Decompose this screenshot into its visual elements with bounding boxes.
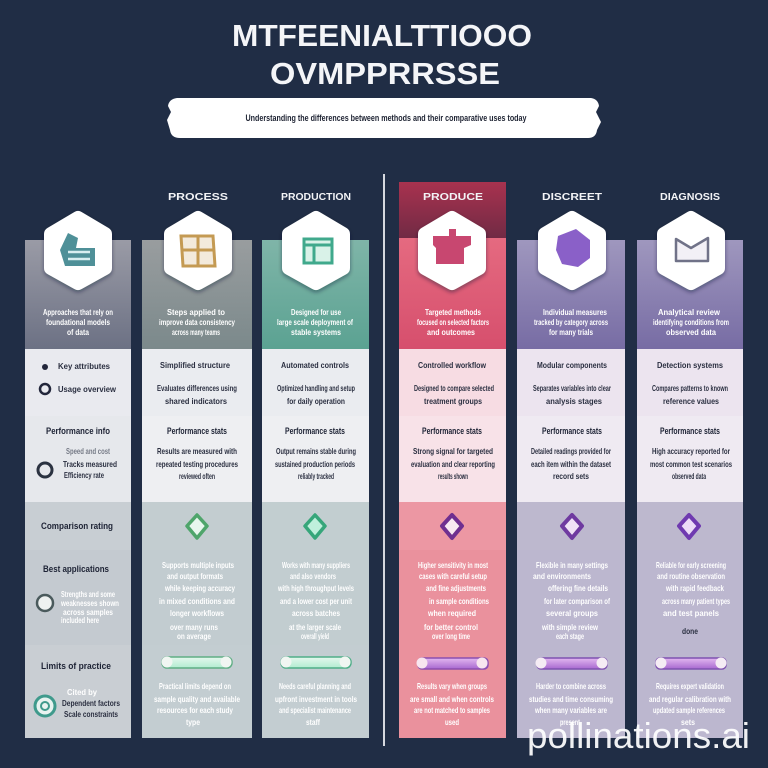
column 1 features: Key attributes [58, 361, 110, 371]
column 4 details [411, 360, 495, 481]
column 3 row 4 text [277, 560, 354, 641]
column 2 details: Performance stats [167, 426, 227, 436]
column 5 description: tracked by category across [534, 317, 608, 327]
column 2 details: Results are measured with [157, 446, 237, 456]
column 5 row 5 text: when many variables are [534, 705, 607, 715]
column 2 row 4 text: Supports multiple inputs [162, 560, 234, 570]
column 6 row 5 text: updated sample references [653, 705, 725, 715]
column 4 row 4 text: over long time [432, 631, 470, 641]
column 5 row 5 text [529, 681, 613, 727]
column 6 details: reference values [663, 396, 719, 406]
column 3 details [275, 360, 356, 481]
column 3 description: large scale deployment of [277, 317, 353, 327]
column 6 row 5 text [649, 681, 731, 727]
column 4 details: Designed to compare selected [414, 383, 494, 393]
column 2 row 4 text: longer workflows [170, 608, 224, 618]
column 2 details: reviewed often [179, 471, 215, 481]
column 5 row 5 text: present [560, 717, 580, 727]
column 5 row 5 text: Harder to combine across [536, 681, 606, 691]
column 5 details [531, 360, 611, 481]
icon: column 2 range bar [162, 656, 232, 668]
column 6 row 4 text: Reliable for early screening [656, 560, 726, 570]
column 3 row 4 text: with high throughput levels [277, 583, 354, 593]
column 1 features: Best applications [43, 564, 109, 574]
column 4 row 4 text: cases with careful setup [419, 571, 487, 581]
column 6 details: High accuracy reported for [652, 446, 730, 456]
column 4 description: focused on selected factors [417, 317, 489, 327]
column 3 heading: PRODUCTION [281, 192, 351, 203]
column 3 description: Designed for use [291, 307, 341, 317]
panel: column 5 [517, 192, 625, 738]
column 6 row 4 text: done [682, 626, 698, 636]
icon: column 2 diamond [187, 515, 207, 538]
column 3 details: Automated controls [281, 360, 349, 370]
column 1 features: Efficiency rate [64, 470, 104, 480]
panel: column 2 [142, 192, 252, 738]
column 2 row 4 text: in mixed conditions and [159, 596, 235, 606]
column 2 details: repeated testing procedures [156, 459, 238, 469]
column 3 row 4 text: and also vendors [290, 571, 336, 581]
column 4 description: and outcomes [427, 327, 475, 337]
column 1 description [43, 307, 113, 337]
column 1 features [38, 361, 117, 574]
column 5 details: analysis stages [546, 396, 602, 406]
panel: column 4 [399, 182, 506, 738]
column 4 description [417, 307, 489, 337]
column 2 heading: PROCESS [168, 192, 228, 203]
column 2 description: across many teams [172, 327, 220, 337]
column 1 row 4 text: included here [61, 615, 99, 625]
column 4 details: results shown [438, 471, 468, 481]
divider line [383, 174, 385, 746]
icon: column 4 hexagon [425, 218, 479, 283]
column 4 row 4 text: in sample conditions [429, 596, 489, 606]
column 5 details: Modular components [537, 360, 607, 370]
column 1 row 4 text: weaknesses shown [60, 598, 119, 608]
title: MTFEENIALTTIOOO [232, 18, 532, 53]
column 3 row 5 text: and specialist maintenance [279, 705, 351, 715]
column 1 features: Speed and cost [66, 446, 110, 456]
column 4 details: Performance stats [422, 426, 482, 436]
panel: column 3 [262, 192, 369, 738]
column 6 details: most common test scenarios [650, 459, 732, 469]
column 2 row 5 text: type [186, 717, 200, 727]
column 5 details: Performance stats [542, 426, 602, 436]
column 4 row 4 text: when required [427, 608, 476, 618]
icon: column 4 range bar [416, 658, 488, 669]
column 5 row 4 text: offering fine details [548, 583, 608, 593]
column 6 details [650, 360, 732, 481]
column 6 row 5 text: and regular calibration with [649, 694, 731, 704]
icon: column 1 hexagon [51, 218, 105, 283]
icon: column 6 hexagon [664, 218, 718, 283]
column 3 row 5 text: staff [306, 717, 320, 727]
title: OVMPPRRSSE [270, 56, 500, 91]
column 3 row 5 text [275, 681, 357, 727]
column 2 row 5 text: resources for each study [157, 705, 233, 715]
column 3 row 4 text: and a lower cost per unit [280, 596, 352, 606]
column 1 description: of data [67, 327, 89, 337]
icon: column 6 diamond [679, 515, 699, 538]
column 6 row 5 text: sets [681, 717, 695, 727]
column 5 row 4 text: with simple review [541, 622, 598, 632]
column 4 row 5 text: used [445, 717, 459, 727]
column 4 row 4 text: for better control [424, 622, 478, 632]
column 3 details: Output remains stable during [276, 446, 356, 456]
column 6 details: Performance stats [660, 426, 720, 436]
column 3 description [277, 307, 353, 337]
column 3 details: Performance stats [285, 426, 345, 436]
column 5 details: Detailed readings provided for [531, 446, 611, 456]
column 5 details: Separates variables into clear [533, 383, 611, 393]
column 1 description: foundational models [46, 317, 110, 327]
column 5 row 4 text: and environments [533, 571, 591, 581]
icon: column 5 range bar [536, 658, 608, 669]
icon: column 4 diamond [442, 515, 462, 538]
column 5 row 4 text: several groups [546, 608, 598, 618]
column 2 details: shared indicators [165, 396, 227, 406]
column 5 row 5 text: studies and time consuming [529, 694, 613, 704]
column 6 row 4 text: with rapid feedback [665, 583, 724, 593]
column 1 row 4 text [60, 589, 119, 625]
column 5 row 4 text: each stage [556, 631, 584, 641]
column 1 row 5 heading: Limits of practice [41, 661, 111, 671]
column 6 row 5 text: Requires expert validation [656, 681, 724, 691]
column 1 description: Approaches that rely on [43, 307, 113, 317]
panel: column 6 [637, 192, 743, 738]
column 6 row 4 text [656, 560, 730, 636]
column 3 description: stable systems [291, 327, 341, 337]
column 2 row 5 text: Practical limits depend on [159, 681, 231, 691]
column 2 row 5 text: sample quality and available [154, 694, 240, 704]
column 1 features: Performance info [46, 426, 110, 436]
column 3 row 4 text: Works with many suppliers [282, 560, 350, 570]
column 3 details: reliably tracked [298, 471, 334, 481]
column 3 row 4 text: across batches [292, 608, 340, 618]
panel: column 1 [25, 218, 131, 738]
column 6 heading: DIAGNOSIS [660, 192, 720, 203]
column 3 row 4 text: overall yield [301, 631, 329, 641]
column 4 row 5 text: Results vary when groups [417, 681, 487, 691]
column 3 row 5 text: Needs careful planning and [279, 681, 351, 691]
column 2 row 4 text [159, 560, 235, 641]
column 3 details: Optimized handling and setup [277, 383, 355, 393]
column 2 row 4 text: and output formats [167, 571, 223, 581]
column 2 details: Simplified structure [160, 360, 230, 370]
column 1 row 5 text [62, 687, 120, 719]
icon: column 5 diamond [562, 515, 582, 538]
column 4 row 5 text: are small and when controls [410, 694, 494, 704]
column 1 features: Comparison rating [41, 521, 113, 531]
column 2 description: Steps applied to [167, 307, 225, 317]
column 4 row 5 text: are not matched to samples [414, 705, 490, 715]
icon: column 3 range bar [280, 656, 351, 668]
column 2 details [156, 360, 238, 481]
column 6 description: Analytical review [658, 307, 720, 317]
column 4 row 5 text [410, 681, 494, 727]
column 6 row 4 text: and test panels [663, 608, 719, 618]
column 3 details: for daily operation [287, 396, 345, 406]
watermark: pollinations.ai [527, 715, 750, 756]
column 5 details: each item within the dataset [531, 459, 611, 469]
column 6 details: Compares patterns to known [652, 383, 728, 393]
icon: column 3 diamond [305, 515, 325, 538]
column 4 details: Strong signal for targeted [413, 446, 493, 456]
column 4 details: treatment groups [424, 396, 482, 406]
column 6 description [653, 307, 729, 337]
column 5 row 4 text: Flexible in many settings [536, 560, 608, 570]
column 3 row 4 text: at the larger scale [289, 622, 341, 632]
column 3 details: sustained production periods [275, 459, 355, 469]
column 5 description: for many trials [549, 327, 593, 337]
column 5 heading: DISCREET [542, 192, 602, 203]
column 4 row 4 text: and fine adjustments [426, 583, 486, 593]
column 1 row 5 text: Scale constraints [64, 709, 118, 719]
column 1 row 4 text: across samples [63, 607, 113, 617]
column 6 details: Detection systems [657, 360, 723, 370]
column 6 description: identifying conditions from [653, 317, 729, 327]
column 2 details: Evaluates differences using [157, 383, 237, 393]
column 6 row 4 text: across many patient types [662, 596, 730, 606]
icon: column 3 hexagon [289, 218, 343, 283]
column 6 description: observed data [666, 327, 716, 337]
column 4 description: Targeted methods [425, 307, 481, 317]
column 2 row 4 text: on average [177, 631, 211, 641]
icon: column 6 range bar [656, 658, 726, 669]
column 5 row 4 text: for later comparison of [544, 596, 610, 606]
column 5 row 4 text [533, 560, 610, 641]
column 1 features: Usage overview [58, 384, 116, 394]
column 1 features: Tracks measured [63, 459, 117, 469]
column 4 heading: PRODUCE [423, 192, 483, 203]
column 2 description [159, 307, 235, 337]
column 2 row 4 text: while keeping accuracy [164, 583, 235, 593]
column 1 row 5 text: Cited by [67, 687, 97, 697]
subtitle banner: Understanding the differences between methods and their comparative uses today [246, 113, 526, 123]
column 4 row 4 text: Higher sensitivity in most [418, 560, 488, 570]
column 1 row 5 text: Dependent factors [62, 698, 120, 708]
title [232, 18, 532, 91]
icon: column 1 row 5 badge [35, 696, 55, 716]
column 3 row 5 text: upfront investment in tools [275, 694, 357, 704]
column 2 row 4 text: over many runs [170, 622, 218, 632]
column 4 details: Controlled workflow [418, 360, 486, 370]
subtitle banner [167, 98, 601, 138]
column 1 row 4 text: Strengths and some [61, 589, 115, 599]
column 2 row 5 text [154, 681, 240, 727]
column 5 details: record sets [553, 471, 589, 481]
icon: column 5 hexagon [545, 218, 599, 283]
icon: column 1 row 4 badge [37, 595, 53, 611]
column 4 row 4 text [418, 560, 489, 641]
column 2 description: improve data consistency [159, 317, 235, 327]
column 5 description: Individual measures [543, 307, 607, 317]
column 4 details: evaluation and clear reporting [411, 459, 495, 469]
column 6 details: observed data [672, 471, 706, 481]
column 6 row 4 text: and routine observation [657, 571, 725, 581]
icon: column 2 hexagon [171, 218, 225, 283]
column 5 description [534, 307, 608, 337]
